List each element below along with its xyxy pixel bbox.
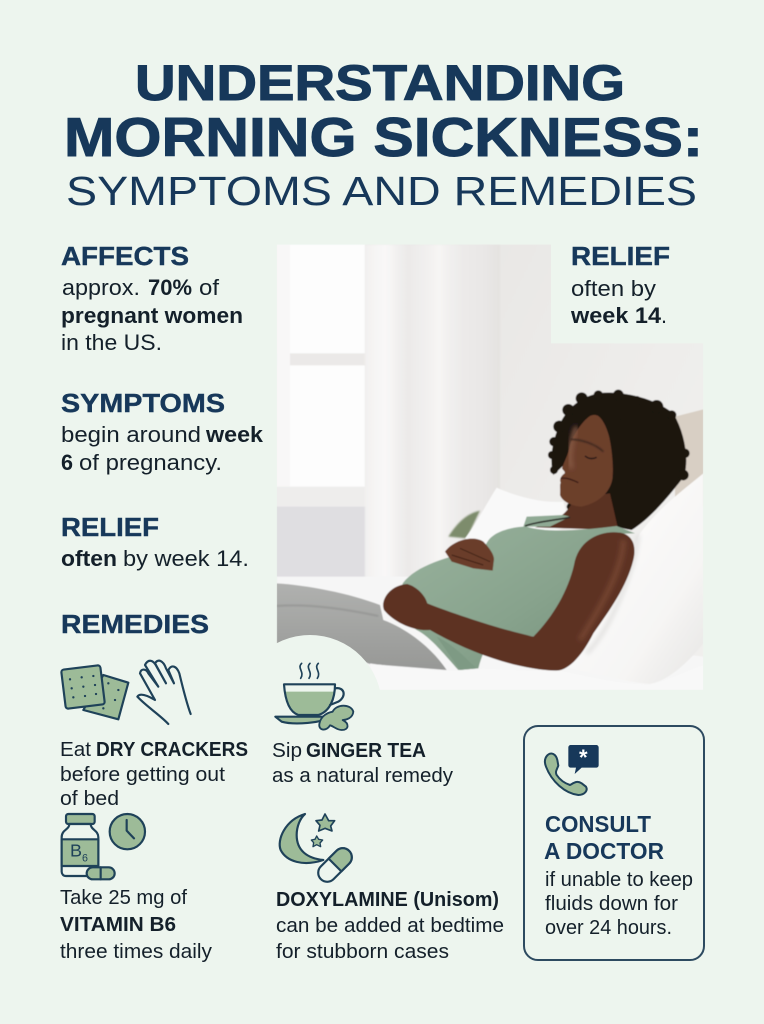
icon: phone with medical message: * (579, 745, 588, 770)
relief callout: RELIEF (571, 241, 670, 271)
text: vitamin B6: three times daily (60, 940, 213, 963)
text: dry crackers: of bed (60, 787, 119, 810)
text block: affects: 70% (148, 275, 192, 300)
text block: symptoms (61, 388, 263, 475)
text block: affects: in the US. (61, 330, 162, 355)
relief callout: week 14 (570, 303, 661, 328)
relief callout: often by (571, 276, 657, 301)
relief callout (570, 241, 670, 328)
title (64, 55, 703, 214)
text block: relief (61, 512, 249, 571)
text block: relief: RELIEF (61, 512, 159, 542)
text block: relief: by week 14. (123, 546, 249, 571)
text: consult: fluids down for (545, 892, 678, 915)
text: ginger tea: as a natural remedy (272, 764, 454, 787)
back pillow (464, 488, 566, 544)
icon: moon, stars and capsule (280, 814, 356, 886)
text block: symptoms: 6 (61, 450, 73, 475)
text: dry crackers: DRY CRACKERS (96, 738, 248, 761)
text: dry crackers: before getting out (60, 763, 225, 786)
text block: affects: of (199, 275, 220, 300)
icon: vitamin B6 bottle and clock: 6 (82, 852, 88, 864)
text block: affects: AFFECTS (61, 241, 189, 271)
text block: affects: pregnant women (61, 303, 243, 328)
icon: vitamin B6 bottle and clock (62, 814, 145, 879)
icon: vitamin B6 bottle and clock: B (70, 841, 82, 861)
tea icon background circle (238, 635, 382, 779)
text: doxylamine: DOXYLAMINE (Unisom) (276, 888, 499, 911)
tank top (401, 515, 635, 670)
text block: affects: approx. (62, 275, 140, 300)
photo: pregnant woman resting in bed (277, 244, 703, 690)
text: ginger tea: Sip (272, 739, 302, 762)
text block: symptoms: SYMPTOMS (61, 388, 225, 418)
heading: remedies: REMEDIES (61, 609, 209, 639)
plant (448, 511, 480, 538)
text: consult (544, 811, 693, 939)
text: doxylamine (276, 888, 504, 963)
text: consult: over 24 hours. (545, 916, 672, 939)
text: ginger tea (272, 739, 454, 787)
headboard (675, 409, 703, 507)
neck and chest (535, 493, 618, 530)
curtain (365, 244, 456, 576)
relief callout: . (661, 303, 667, 328)
face (560, 414, 614, 506)
text: consult: if unable to keep (545, 868, 693, 891)
bed sheet foreground (370, 662, 557, 670)
text: dry crackers (60, 738, 248, 810)
legs (277, 583, 447, 670)
panel: consult a doctor (524, 726, 704, 960)
text: vitamin B6: VITAMIN B6 (60, 913, 176, 936)
icon: phone with medical message (545, 745, 599, 795)
text block: relief: often (61, 546, 117, 571)
text: vitamin B6: Take 25 mg of (60, 886, 187, 909)
text: vitamin B6 (60, 886, 213, 963)
icon: ginger tea (275, 663, 353, 730)
text: dry crackers: Eat (60, 738, 91, 761)
text: consult: CONSULT (545, 811, 652, 837)
text block: symptoms: begin around (61, 422, 201, 447)
bed (277, 577, 703, 690)
text block: symptoms: week (205, 422, 263, 447)
icon: crackers and hand (61, 661, 191, 724)
right pillow (590, 474, 704, 682)
text: doxylamine: can be added at bedtime (276, 914, 504, 937)
title: SYMPTOMS AND REMEDIES (66, 168, 697, 214)
text: ginger tea: GINGER TEA (306, 739, 426, 762)
text: doxylamine: for stubborn cases (276, 940, 449, 963)
window (277, 244, 372, 578)
hair back (548, 390, 690, 530)
text block: symptoms: of pregnancy. (79, 450, 222, 475)
text: consult: A DOCTOR (544, 838, 664, 864)
arm and hands (383, 532, 635, 671)
title: UNDERSTANDING (135, 55, 625, 111)
title: MORNING SICKNESS: (64, 106, 703, 168)
text block: affects (61, 241, 243, 355)
